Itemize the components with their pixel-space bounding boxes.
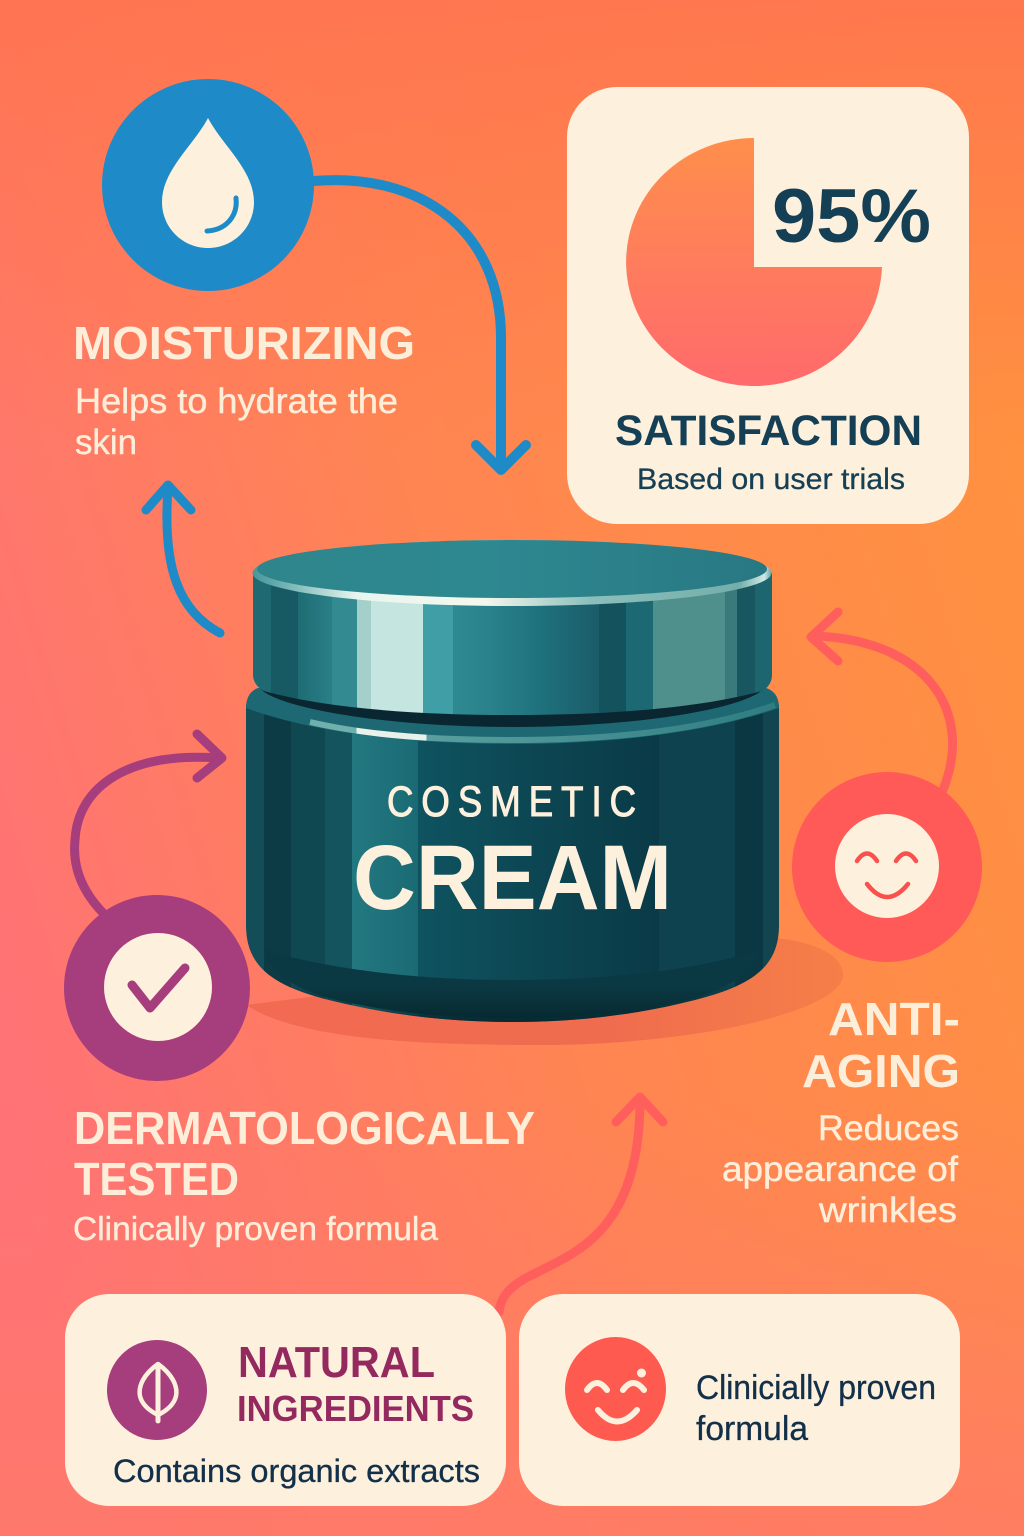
heading: satisfaction: SATISFACTION: [615, 407, 922, 455]
icon: winking face: [565, 1337, 666, 1441]
panel: natural ingredients: INGREDIENTS: [237, 1388, 474, 1429]
heading: anti-aging: ANTI-: [828, 993, 960, 1045]
heading: moisturizing: MOISTURIZING: [73, 317, 415, 369]
arrow: anti-aging to jar: [811, 612, 953, 790]
jar body: [246, 705, 779, 1022]
stat: 95 percent: 95%: [772, 174, 931, 259]
icon: water drop in blue circle: [102, 79, 314, 291]
heading: anti-aging: AGING: [802, 1045, 960, 1097]
text: moisturizing description: [75, 382, 398, 462]
text: anti-aging description: wrinkles: [818, 1191, 957, 1230]
panel: natural ingredients: [65, 1294, 506, 1506]
panel: clinically proven: [519, 1294, 960, 1506]
icon: leaf in purple circle: [107, 1340, 207, 1440]
heading: natural ingredients: NATURAL: [238, 1338, 435, 1387]
text: clinically proven formula: [696, 1369, 936, 1448]
heading: dermatologically tested: DERMATOLOGICALLY: [74, 1102, 535, 1154]
text: moisturizing description: skin: [75, 423, 137, 462]
text: clinically proven formula: Clinicially proven: [696, 1369, 936, 1407]
icon: smiling face in red circle: [792, 772, 982, 962]
arrow: jar to moisturizing: [146, 485, 220, 633]
jar shadow: [246, 938, 843, 1045]
jar lid: [253, 573, 772, 715]
heading: dermatologically tested: [74, 1102, 535, 1205]
icon: check mark in purple circle: [64, 895, 250, 1081]
arrow: dermatologically tested to jar: [75, 734, 222, 915]
heading: anti-aging: [802, 993, 960, 1097]
text: anti-aging description: appearance of: [722, 1150, 958, 1189]
text: dermatologically tested description: Clinically proven formula: [73, 1210, 439, 1247]
arrow: natural ingredients to jar: [499, 1097, 663, 1312]
text: contains organic extracts: Contains organic extracts: [113, 1453, 480, 1489]
cosmetic cream jar: [246, 540, 779, 1022]
text: clinically proven formula: formula: [696, 1410, 808, 1448]
text: moisturizing description: Helps to hydrate the: [75, 382, 398, 421]
label: cosmetic: COSMETIC: [387, 778, 636, 826]
text: anti-aging description: [722, 1109, 959, 1230]
pie chart: 75 percent: [626, 138, 882, 386]
label: cream: CREAM: [353, 827, 672, 929]
text: satisfaction description: Based on user trials: [637, 463, 905, 496]
text: anti-aging description: Reduces: [818, 1109, 959, 1148]
heading: dermatologically tested: TESTED: [74, 1153, 239, 1205]
panel: satisfaction: [567, 87, 969, 524]
arrow: moisturizing to jar: [314, 180, 526, 470]
